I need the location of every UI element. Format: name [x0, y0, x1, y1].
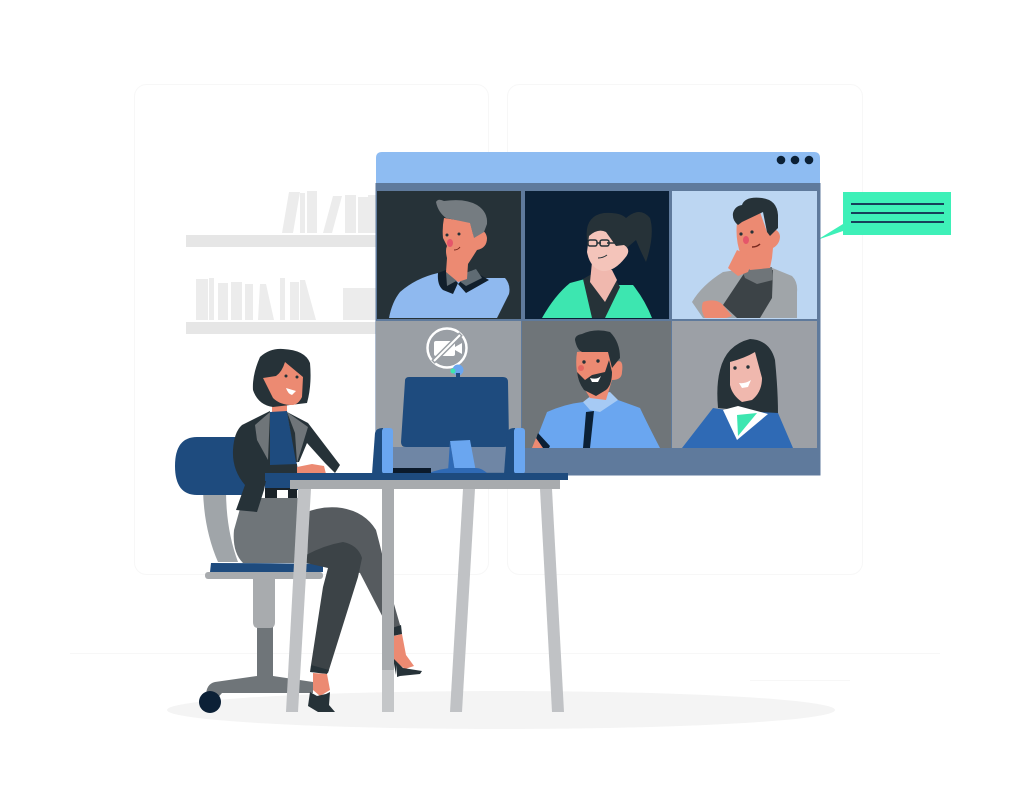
chair back support: [203, 490, 238, 562]
desk: [265, 473, 568, 712]
person: woman at desk: [233, 349, 422, 712]
icon: camera off: [428, 328, 466, 368]
desk top: [265, 473, 568, 489]
chair seat base: [205, 572, 323, 579]
keyboard: [393, 468, 431, 474]
chair: [175, 437, 323, 713]
jacket body and near arm: [233, 411, 297, 512]
blouse: [265, 411, 300, 490]
chair wheel: [199, 691, 221, 713]
far foot: [393, 634, 414, 669]
floor shadow: [167, 691, 835, 729]
face: [263, 362, 303, 405]
desk back leg: [382, 489, 394, 712]
speaker left: [372, 428, 393, 474]
desk setup: [372, 364, 525, 474]
chair backrest: [175, 437, 248, 495]
near cuff: [310, 665, 329, 674]
speaker right: [504, 428, 525, 474]
lapels: [255, 412, 270, 460]
belt: [265, 488, 297, 498]
monitor: [393, 364, 509, 474]
tile: woman in blue blazer: [672, 321, 817, 448]
far cuff: [392, 625, 402, 636]
window frame: [376, 183, 820, 476]
near leg: [306, 542, 362, 673]
chair base: [206, 627, 313, 701]
neck: [272, 397, 287, 420]
near foot: [313, 673, 330, 696]
callout: speech bubble: [817, 192, 951, 240]
jacket far arm: [287, 412, 340, 473]
tile: woman with glasses on navy background: [525, 191, 669, 319]
chair cushion: [210, 563, 323, 572]
hips: [234, 498, 308, 563]
tile: man thinking on dark background: [377, 191, 521, 319]
tile: man with hand on chin on light blue background: [672, 191, 817, 319]
chair column: [253, 578, 275, 628]
far shoe: [393, 658, 422, 677]
window control dots: [777, 156, 813, 164]
tile: camera off with monitor area: [376, 321, 521, 448]
tile: bearded man in blue shirt: [522, 321, 671, 448]
bookshelves: [186, 191, 378, 334]
panel: video call window: [376, 152, 820, 476]
far leg and thigh: [300, 507, 400, 635]
desk legs: [286, 489, 311, 712]
hand: [297, 464, 326, 474]
hair: [253, 349, 311, 407]
title bar: [376, 152, 820, 183]
background: room panels: [70, 84, 940, 681]
near shoe: [308, 692, 335, 712]
